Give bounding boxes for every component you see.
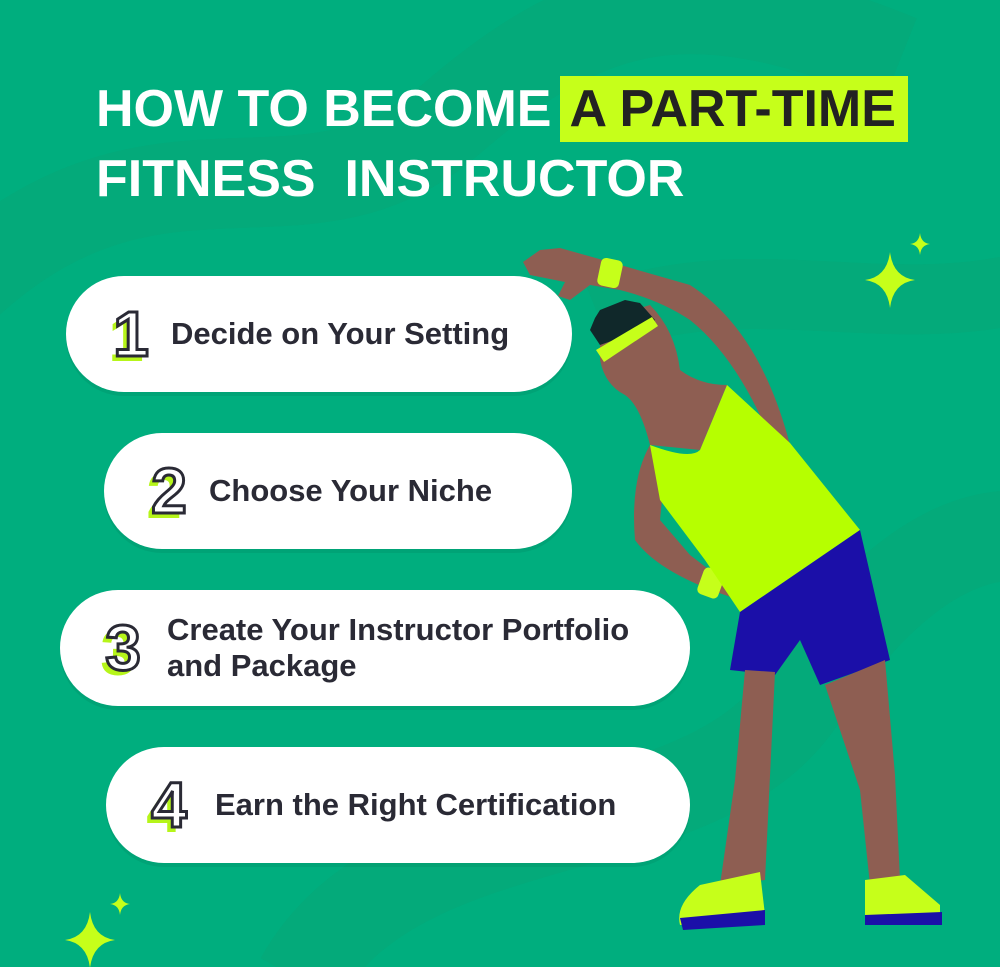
number 3: 3 — [105, 612, 141, 684]
title: HOW TO BECOME A PART-TIME — [96, 80, 896, 138]
title: FITNESS INSTRUCTOR — [96, 150, 684, 208]
raised arm — [523, 248, 790, 450]
step 3 text — [167, 612, 629, 683]
shorts — [730, 530, 890, 685]
icon: sparkles bottom — [65, 893, 130, 967]
step 3 text: Create Your Instructor Portfolio — [167, 612, 629, 647]
lower arm to hip — [634, 445, 770, 600]
step 3 — [60, 590, 690, 706]
step 1 text: Decide on Your Setting — [171, 316, 509, 351]
step 3 text: and Package — [167, 648, 357, 683]
title highlight — [560, 76, 908, 142]
step 4 — [106, 747, 690, 863]
head and neck — [600, 305, 727, 450]
icon: sparkles top — [865, 233, 930, 308]
step 2 text: Choose Your Niche — [209, 473, 492, 508]
title — [96, 80, 896, 208]
step 4 text: Earn the Right Certification — [215, 787, 616, 822]
figure: stretching instructor — [523, 248, 942, 930]
step 2 — [104, 433, 572, 549]
number 1: 1 — [113, 298, 149, 370]
legs — [720, 670, 775, 885]
number 4: 4 — [151, 769, 187, 841]
shoes — [679, 872, 765, 925]
step 1 — [66, 276, 572, 392]
number 2: 2 — [151, 455, 187, 527]
tank top — [650, 385, 860, 612]
